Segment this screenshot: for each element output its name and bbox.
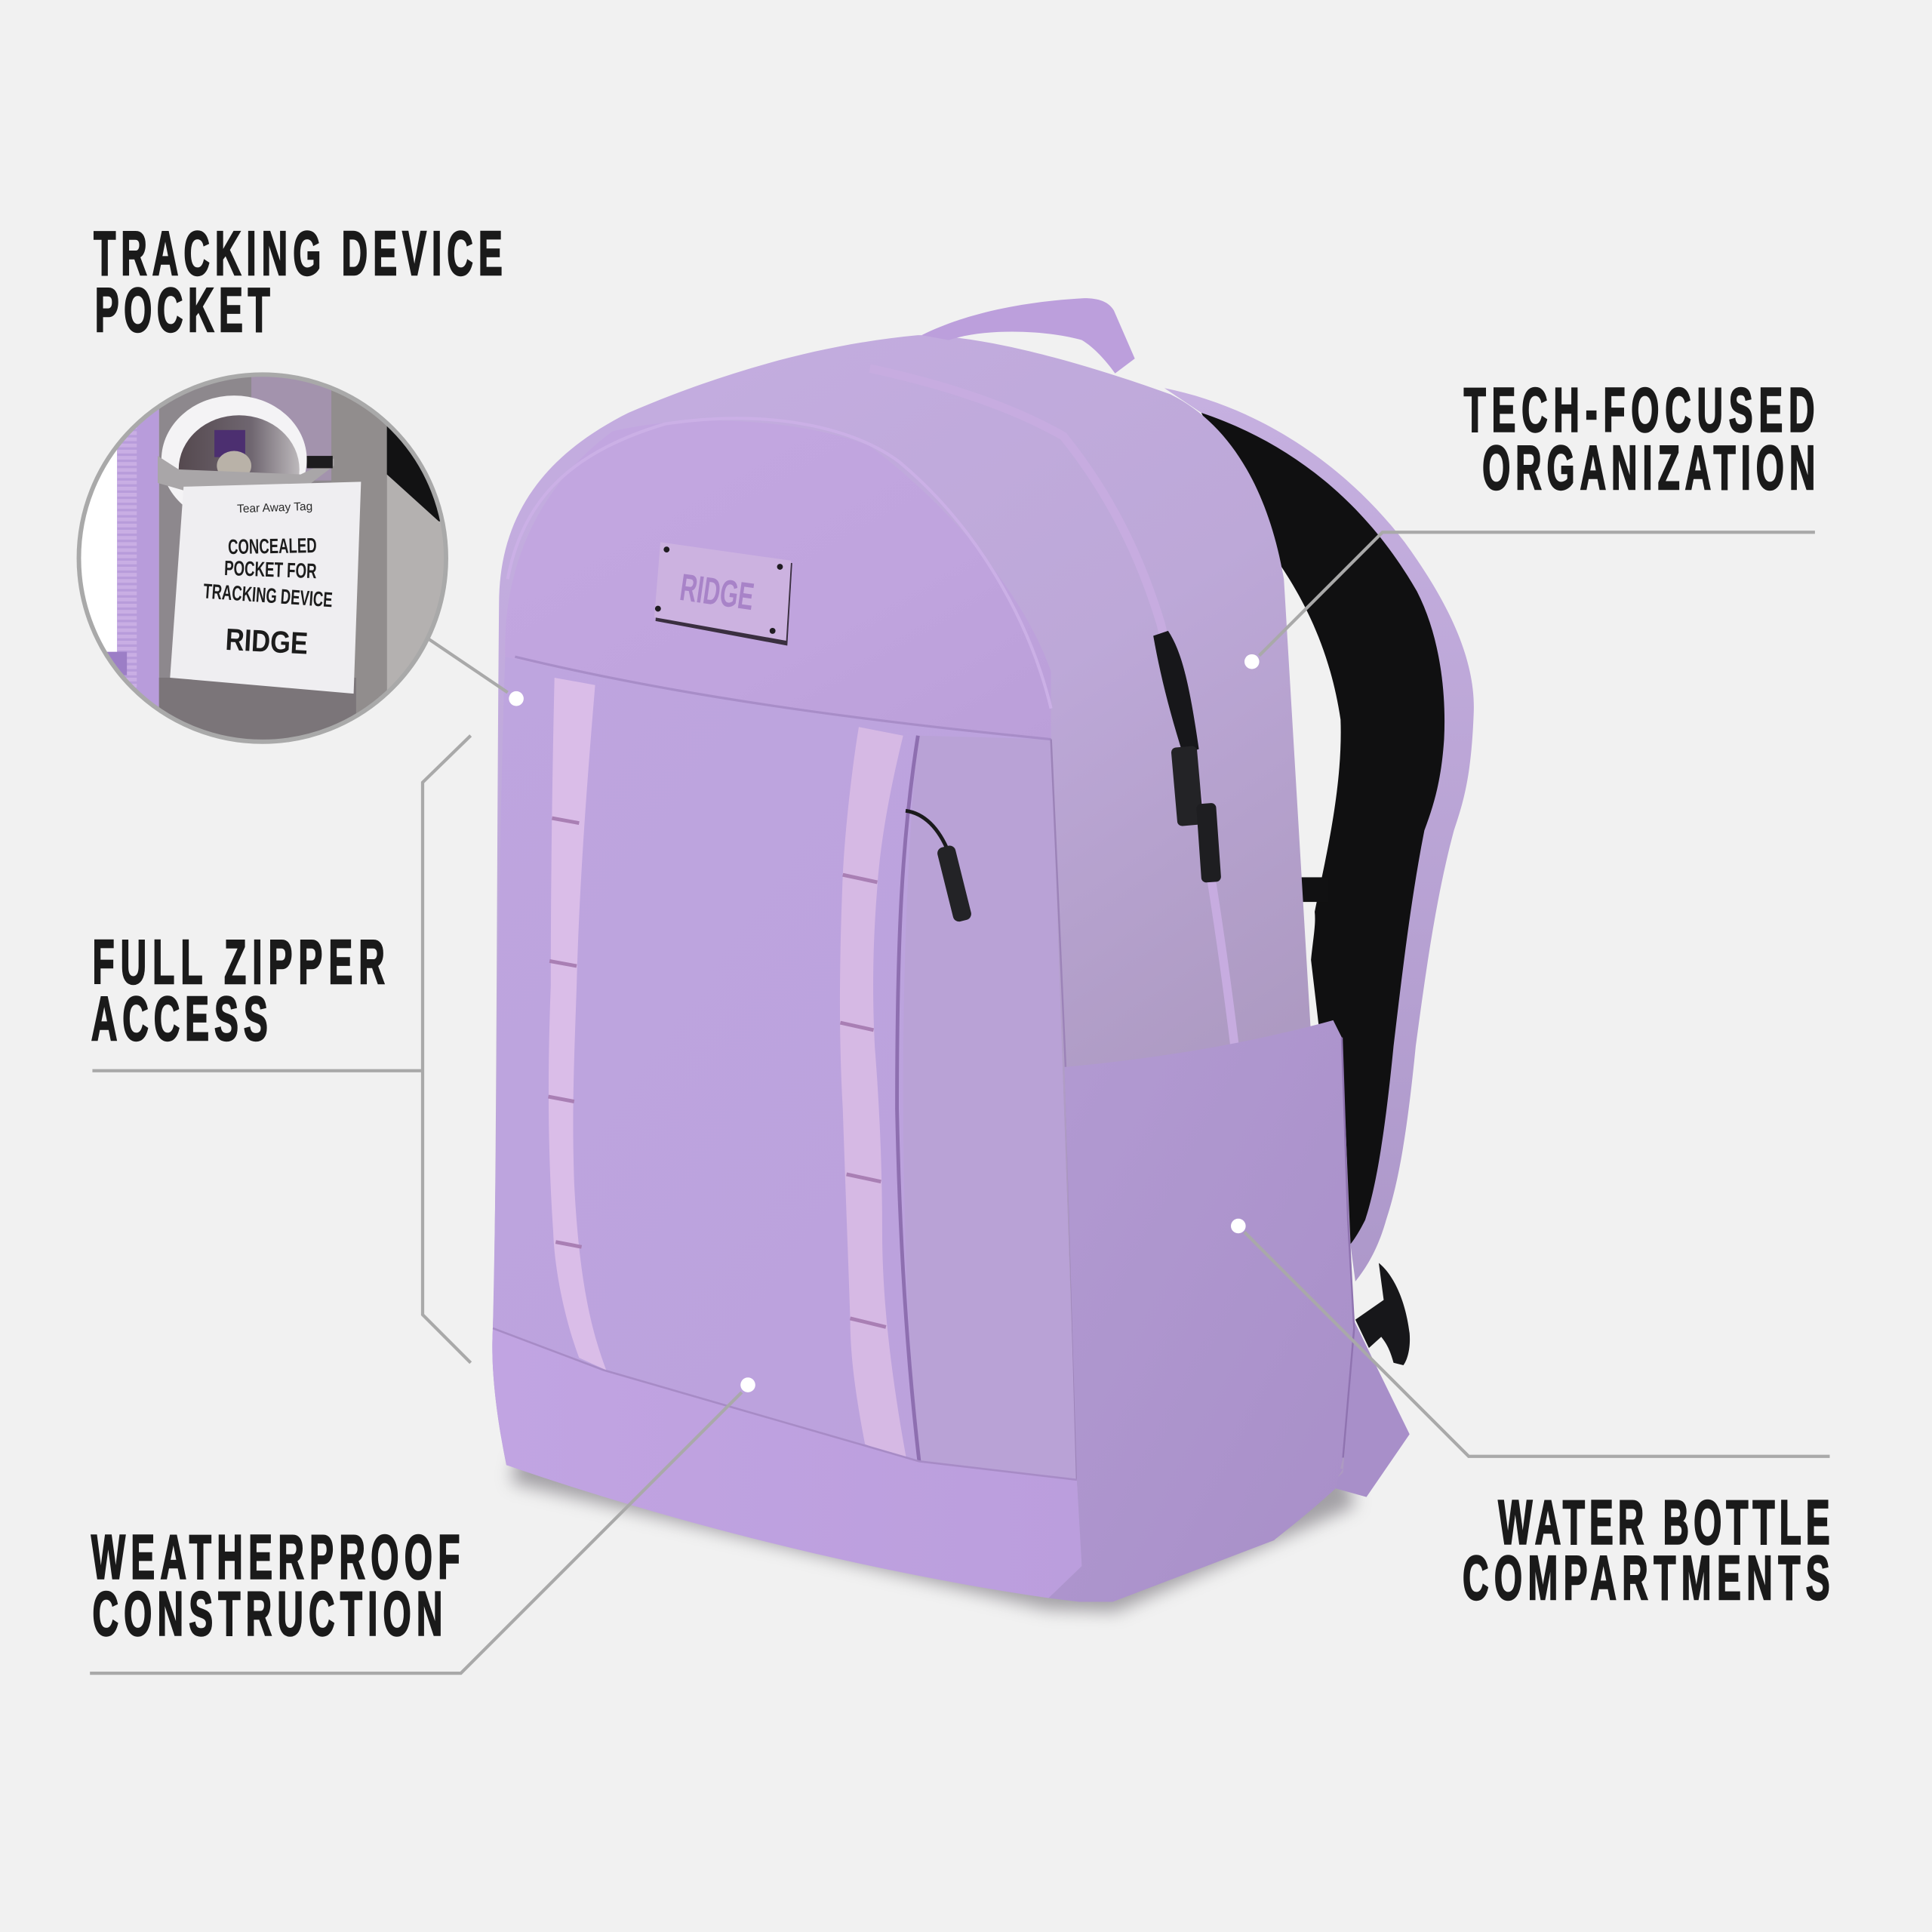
water bottle pocket	[1048, 1020, 1354, 1601]
front dome flap	[505, 420, 1051, 740]
front panel	[493, 657, 1077, 1480]
top handle	[921, 298, 1135, 374]
heading: water bottle compartments: COMPARTMENTS	[1463, 1544, 1830, 1614]
paper tag	[170, 481, 361, 694]
heading: water bottle compartments	[1463, 1488, 1830, 1614]
callout line: water bottle compartments	[1231, 1219, 1829, 1457]
lower fabric	[158, 678, 356, 740]
heading: tech-focused organization	[1464, 376, 1815, 503]
back padding	[1201, 413, 1444, 1247]
heading: water bottle compartments: WATER BOTTLE	[1498, 1488, 1830, 1558]
zipper teeth	[121, 413, 133, 740]
heading: tracking device pocket: POCKET	[95, 276, 270, 346]
shoulder strap	[1164, 388, 1474, 1281]
lilac lining	[251, 370, 331, 481]
callout line: tracking device pocket	[428, 638, 524, 706]
lighter mesh panel	[386, 475, 444, 690]
strap connector	[1301, 877, 1328, 902]
flap lower seam	[515, 657, 1051, 740]
front corner fold	[1051, 740, 1077, 1480]
tag label: concealed pocket text: CONCEALED	[228, 534, 317, 558]
side bottom corner	[1048, 1469, 1343, 1601]
callout bracket: full zipper access	[92, 736, 471, 1363]
main zipper pulls	[1153, 631, 1221, 883]
ground shadow	[512, 1454, 1355, 1612]
inset circle: tracking device pocket	[78, 370, 456, 752]
tag label: concealed pocket text	[204, 538, 332, 607]
logo plate	[654, 542, 792, 646]
right webbing strap	[840, 727, 907, 1461]
zipper tape	[117, 407, 159, 740]
dome seam	[508, 418, 1051, 709]
pocket side seam	[1342, 1038, 1354, 1457]
side buckle	[1355, 1263, 1410, 1365]
heading: tech-focused organization: TECH-FOCUSED	[1464, 376, 1815, 445]
body silhouette	[492, 335, 1354, 1601]
heading: full zipper access	[91, 928, 385, 1054]
front pocket zipper pull	[906, 811, 973, 923]
pocket lip	[158, 456, 334, 491]
base seam	[493, 1328, 1077, 1480]
lower lilac tab	[106, 652, 127, 675]
heading: full zipper access: ACCESS	[91, 985, 268, 1054]
left webbing strap	[549, 678, 606, 1371]
black lining	[307, 456, 333, 468]
apple logo	[217, 451, 251, 472]
heading: tracking device pocket: TRACKING DEVICE	[94, 220, 503, 288]
tag label: tear away tag: Tear Away Tag	[237, 500, 313, 515]
heading: tracking device pocket	[94, 220, 503, 346]
tag label: concealed pocket text: POCKET FOR	[224, 556, 317, 583]
fabric background	[158, 377, 388, 707]
grey webbing	[377, 418, 387, 475]
heading: full zipper access: FULL ZIPPER	[92, 928, 385, 997]
logo plate: RIDGE	[678, 565, 757, 618]
black padding	[386, 426, 441, 521]
purple reflection	[214, 430, 245, 457]
heading: tech-focused organization: ORGANIZATION	[1482, 434, 1815, 503]
base panel	[492, 1328, 1081, 1598]
tag logo: RIDGE	[225, 622, 309, 661]
callout line: tech-focused organization	[1244, 532, 1815, 669]
front pocket zipper seam	[897, 736, 919, 1461]
airtag metal	[178, 415, 300, 491]
heading: weatherproof construction: CONSTRUCTION	[92, 1580, 442, 1649]
airtag holder	[162, 395, 306, 504]
tag label: concealed pocket text: TRACKING DEVICE	[202, 579, 334, 611]
backpack illustration	[492, 298, 1474, 1612]
heading: weatherproof construction: WEATHERPROOF	[91, 1523, 460, 1592]
lower strap flap	[1336, 1321, 1410, 1497]
callout line: weatherproof construction	[90, 1377, 755, 1673]
main zipper	[870, 368, 1237, 1066]
right sliver panel	[903, 736, 1077, 1480]
heading: weatherproof construction	[91, 1523, 460, 1649]
